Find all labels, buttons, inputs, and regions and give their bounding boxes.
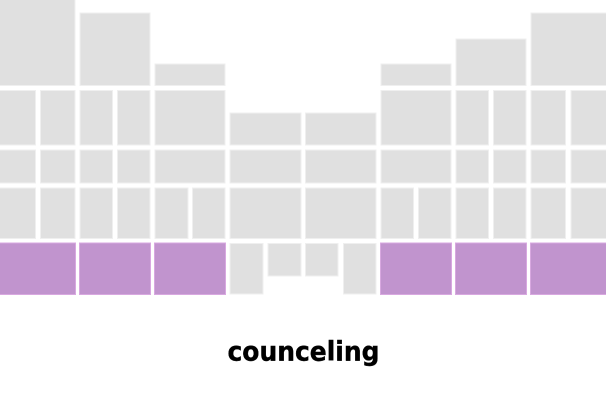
grey blocks: top row	[0, 0, 606, 86]
grey blocks: third row	[0, 150, 606, 183]
highlighted purple blocks: left	[0, 243, 226, 294]
label: counceling: counceling	[228, 336, 380, 368]
grey blocks: second row	[0, 90, 606, 145]
grey blocks: fourth row	[0, 188, 606, 238]
highlighted purple blocks: right	[380, 243, 606, 294]
grey blocks: bottom centre	[230, 244, 376, 294]
